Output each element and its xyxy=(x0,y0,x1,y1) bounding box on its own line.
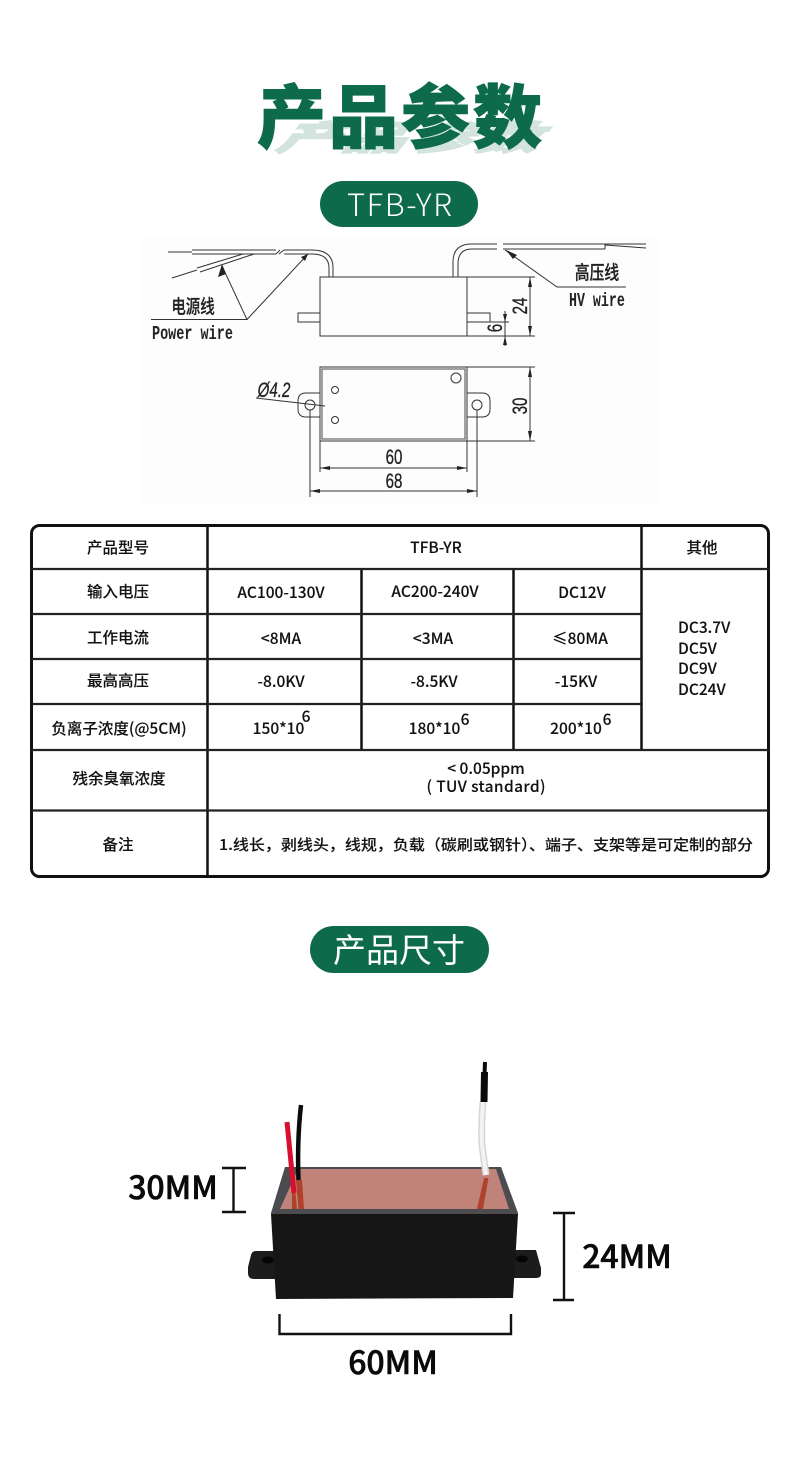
dimension: 60MM xyxy=(280,1314,511,1384)
row: residual ozone: 残余臭氧浓度 xyxy=(72,767,166,789)
dimension: 60MM: 60MM xyxy=(348,1338,438,1384)
top view of housing xyxy=(298,367,490,441)
row: input voltage xyxy=(87,580,607,603)
white high-voltage wire xyxy=(482,1062,486,1175)
row: working current: ≤80MA xyxy=(552,627,608,649)
red wire xyxy=(287,1122,294,1193)
row: residual ozone xyxy=(72,757,546,797)
row: negative ion concentration: 6 xyxy=(302,705,311,727)
row: negative ion concentration: 6 xyxy=(461,708,470,730)
row: residual ozone: ( TUV standard) xyxy=(426,775,546,797)
technical drawing xyxy=(142,237,660,505)
label: power wire: 电源线 xyxy=(171,290,215,319)
cell: other voltages xyxy=(678,616,731,700)
parameter table xyxy=(31,525,769,877)
row: input voltage: DC12V xyxy=(558,581,607,603)
label: power wire xyxy=(152,290,233,345)
cell: other voltages: DC3.7V xyxy=(678,616,731,638)
HV wire drawing xyxy=(453,244,646,287)
row: maximum high voltage: -8.5KV xyxy=(410,670,458,692)
row: negative ion concentration: 6 xyxy=(603,708,612,730)
row: notes: 备注 xyxy=(102,833,134,855)
dimension: 24MM: 24MM xyxy=(582,1232,672,1278)
side view of housing xyxy=(298,277,490,336)
row: negative ion concentration: 180*10 xyxy=(409,717,460,739)
row: maximum high voltage xyxy=(87,669,598,692)
title: 产品参数: 产品参数 xyxy=(257,62,542,162)
dimensions: 24, 6 and 30: 30 xyxy=(507,398,532,414)
product photo xyxy=(248,1062,541,1299)
power wire drawing xyxy=(151,250,333,320)
dimensions: 60 and 68: 60 xyxy=(386,444,402,469)
row: working current: <3MA xyxy=(413,627,453,649)
resin surface xyxy=(280,1169,509,1209)
dimensions: 60 and 68: 68 xyxy=(386,468,402,493)
cell: other voltages: DC9V xyxy=(678,657,718,679)
housing rim xyxy=(271,1167,518,1214)
row: negative ion concentration xyxy=(51,705,612,739)
row: maximum high voltage: 最高高压 xyxy=(87,669,149,691)
row: model: 其他 xyxy=(686,536,718,558)
black wire xyxy=(298,1105,301,1180)
label: HV wire xyxy=(569,257,625,312)
dimension: 24MM xyxy=(553,1213,672,1300)
dimensions: 60 and 68 xyxy=(310,410,477,497)
row: residual ozone: < 0.05ppm xyxy=(447,757,525,779)
dimensions: 24, 6 and 30 xyxy=(467,277,535,441)
row: working current: <8MA xyxy=(261,627,301,649)
row: input voltage: 输入电压 xyxy=(87,580,149,602)
dimension: 4.2 hole xyxy=(256,377,325,406)
dimensions: 24, 6 and 30: 24 xyxy=(507,298,532,314)
dimension: 4.2 hole: Ø4.2 xyxy=(257,377,290,402)
wire reflections xyxy=(292,1178,488,1209)
table grid xyxy=(31,525,769,877)
row: model xyxy=(87,536,718,558)
badge: TFB-YR xyxy=(320,180,478,227)
mounting tabs xyxy=(248,1250,541,1279)
badge: TFB-YR: TFB-YR xyxy=(347,180,452,225)
cell: other voltages: DC24V xyxy=(678,678,727,700)
row: model: 产品型号 xyxy=(87,536,149,558)
row: model: TFB-YR xyxy=(410,536,462,558)
row: negative ion concentration: 200*10 xyxy=(550,717,602,739)
label: HV wire: HV wire xyxy=(569,290,625,312)
row: negative ion concentration: 150*10 xyxy=(253,717,304,739)
dimensions: 24, 6 and 30: 6 xyxy=(482,324,507,332)
row: maximum high voltage: -15KV xyxy=(555,670,598,692)
row: notes: 1.线长，剥线头，线规，负载（碳刷或钢针）、端子、支架等是可定制的部分 xyxy=(219,834,753,855)
label: power wire: Power wire xyxy=(152,323,233,345)
housing front xyxy=(271,1214,518,1299)
row: working current xyxy=(87,626,608,649)
row: maximum high voltage: -8.0KV xyxy=(257,670,305,692)
title: 产品参数: 产品参数 xyxy=(266,111,566,160)
row: negative ion concentration: 负离子浓度(@5CM) xyxy=(51,717,187,739)
row: input voltage: AC100-130V xyxy=(237,581,325,603)
row: working current: 工作电流 xyxy=(87,626,149,648)
label: HV wire: 高压线 xyxy=(575,257,619,285)
row: input voltage: AC200-240V xyxy=(391,580,479,602)
cell: other voltages: DC5V xyxy=(678,637,718,659)
dimension: 30MM: 30MM xyxy=(128,1163,218,1209)
badge: 产品尺寸: 产品尺寸 xyxy=(333,924,465,972)
